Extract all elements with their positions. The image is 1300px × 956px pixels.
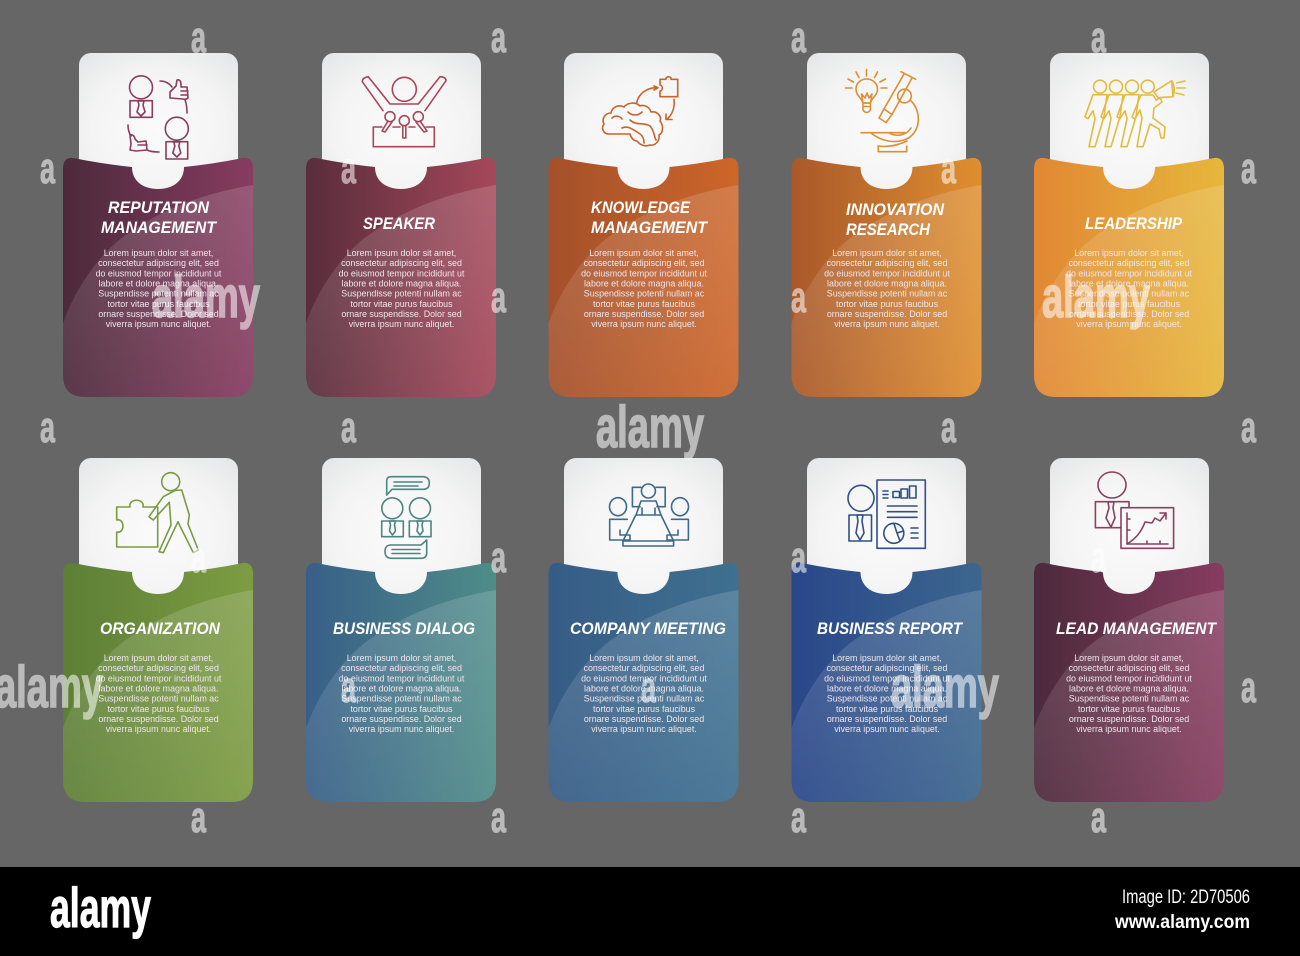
body text: do eiusmod tempor incididunt ut bbox=[96, 673, 222, 683]
watermarks: alamy bbox=[1042, 265, 1150, 330]
pocket bbox=[306, 563, 496, 802]
watermarks: a bbox=[1241, 144, 1256, 193]
watermarks: a bbox=[941, 144, 956, 193]
watermarks: a bbox=[791, 13, 806, 62]
heading: COMPANY MEETING bbox=[570, 619, 726, 638]
body text: ornare suspendisse. Dolor sed bbox=[1069, 714, 1189, 724]
white tab bbox=[79, 53, 238, 193]
body text: do eiusmod tempor incididunt ut bbox=[824, 268, 950, 278]
heading: RESEARCH bbox=[846, 220, 931, 239]
body text: ornare suspendisse. Dolor sed bbox=[341, 309, 462, 319]
pocket bbox=[63, 158, 253, 397]
body text: consectetur adipiscing elit, sed bbox=[1069, 258, 1189, 268]
card: company meeting bbox=[548, 458, 738, 802]
pocket bbox=[1034, 563, 1224, 802]
icon: light bulb and microscope bbox=[846, 70, 918, 152]
body text: ornare suspendisse. Dolor sed bbox=[584, 309, 704, 319]
card: business report bbox=[792, 458, 982, 802]
heading: KNOWLEDGE bbox=[591, 198, 691, 217]
heading bbox=[101, 198, 217, 237]
heading: BUSINESS REPORT bbox=[817, 619, 963, 638]
body text: Lorem ipsum dolor sit amet, bbox=[589, 653, 699, 663]
watermarks: a bbox=[341, 144, 356, 193]
body text: tortor vitae purus faucibus bbox=[836, 299, 939, 309]
heading: MANAGEMENT bbox=[101, 218, 217, 237]
white tab bbox=[807, 53, 966, 193]
body text: do eiusmod tempor incididunt ut bbox=[96, 268, 222, 278]
watermarks: a bbox=[791, 533, 806, 582]
body text: labore et dolore magna aliqua. bbox=[1069, 278, 1189, 288]
body text: tortor vitae purus faucibus bbox=[350, 704, 453, 714]
body text: do eiusmod tempor incididunt ut bbox=[339, 268, 465, 278]
watermarks: a bbox=[341, 663, 356, 712]
card: leadership bbox=[1034, 53, 1224, 397]
body text: do eiusmod tempor incididunt ut bbox=[339, 673, 465, 683]
body text: Suspendisse potenti nullam ac bbox=[584, 289, 705, 299]
body text: tortor vitae purus faucibus bbox=[107, 299, 210, 309]
body text: tortor vitae purus faucibus bbox=[1078, 299, 1181, 309]
watermarks: a bbox=[1241, 403, 1256, 452]
watermarks: a bbox=[1091, 793, 1106, 842]
watermarks: a bbox=[491, 273, 506, 322]
body text: do eiusmod tempor incididunt ut bbox=[1066, 268, 1192, 278]
body text: Lorem ipsum dolor sit amet, bbox=[104, 248, 213, 258]
body text: do eiusmod tempor incididunt ut bbox=[1066, 673, 1192, 683]
icon: person with report document bbox=[848, 480, 925, 548]
body text: viverra ipsum nunc aliquet. bbox=[834, 724, 940, 734]
body text: viverra ipsum nunc aliquet. bbox=[1076, 724, 1182, 734]
body text: tortor vitae purus faucibus bbox=[836, 704, 939, 714]
body text: viverra ipsum nunc aliquet. bbox=[349, 319, 454, 329]
card: business dialog bbox=[306, 458, 496, 802]
body text: Lorem ipsum dolor sit amet, bbox=[832, 653, 942, 663]
icon: people around meeting table bbox=[610, 484, 688, 546]
body text: do eiusmod tempor incididunt ut bbox=[824, 673, 950, 683]
watermarks: a bbox=[191, 793, 206, 842]
heading: ORGANIZATION bbox=[100, 619, 221, 638]
heading: LEAD MANAGEMENT bbox=[1056, 619, 1217, 638]
card: reputation management bbox=[63, 53, 253, 397]
pocket bbox=[548, 158, 738, 397]
heading: BUSINESS DIALOG bbox=[333, 619, 475, 638]
body text: viverra ipsum nunc aliquet. bbox=[834, 319, 940, 329]
footer bar bbox=[0, 867, 1300, 956]
watermarks: a bbox=[941, 403, 956, 452]
body text: ornare suspendisse. Dolor sed bbox=[98, 309, 219, 319]
image id: Image ID: 2D70506 bbox=[1122, 887, 1250, 908]
watermarks: a bbox=[1091, 13, 1106, 62]
pocket bbox=[548, 563, 738, 802]
body text: tortor vitae purus faucibus bbox=[1078, 704, 1181, 714]
white tab bbox=[807, 458, 966, 598]
body text: Lorem ipsum dolor sit amet, bbox=[104, 653, 213, 663]
card: knowledge management bbox=[548, 53, 738, 397]
icon: people exchanging thumbs up bbox=[128, 76, 188, 159]
body text: labore et dolore magna aliqua. bbox=[584, 684, 704, 694]
body text: ornare suspendisse. Dolor sed bbox=[341, 714, 462, 724]
body text: consectetur adipiscing elit, sed bbox=[584, 258, 704, 268]
heading: SPEAKER bbox=[363, 214, 436, 233]
white tab bbox=[1050, 458, 1209, 598]
body text: ornare suspendisse. Dolor sed bbox=[98, 714, 219, 724]
pocket bbox=[63, 563, 253, 802]
watermarks: a bbox=[491, 13, 506, 62]
body text: tortor vitae purus faucibus bbox=[107, 704, 210, 714]
icon: brain and puzzle piece bbox=[603, 77, 678, 146]
icon: speaker with microphones bbox=[362, 77, 446, 147]
body text: labore et dolore magna aliqua. bbox=[99, 684, 218, 694]
icon: leader with megaphone and followers bbox=[1085, 80, 1185, 147]
icon: two people in dialog bbox=[382, 477, 431, 558]
card: speaker bbox=[306, 53, 496, 397]
watermarks: alamy bbox=[152, 265, 260, 330]
body text: Suspendisse potenti nullam ac bbox=[98, 694, 219, 704]
card: lead management bbox=[1034, 458, 1224, 802]
watermarks: a bbox=[791, 273, 806, 322]
heading: INNOVATION bbox=[846, 200, 945, 219]
body text: Suspendisse potenti nullam ac bbox=[341, 289, 462, 299]
heading bbox=[846, 200, 945, 239]
heading: MANAGEMENT bbox=[591, 218, 709, 237]
footer logo: alamy bbox=[50, 876, 151, 939]
body text: labore et dolore magna aliqua. bbox=[342, 684, 461, 694]
body text: viverra ipsum nunc aliquet. bbox=[106, 319, 211, 329]
body text: viverra ipsum nunc aliquet. bbox=[106, 724, 211, 734]
body text: Suspendisse potenti nullam ac bbox=[827, 289, 948, 299]
body text: viverra ipsum nunc aliquet. bbox=[591, 319, 697, 329]
body text: consectetur adipiscing elit, sed bbox=[98, 258, 219, 268]
pocket bbox=[792, 563, 982, 802]
card: organization bbox=[63, 458, 253, 802]
website: www.alamy.com bbox=[1114, 912, 1250, 933]
body text: Suspendisse potenti nullam ac bbox=[827, 694, 948, 704]
card: innovation research bbox=[792, 53, 982, 397]
body text: viverra ipsum nunc aliquet. bbox=[591, 724, 697, 734]
body text: Lorem ipsum dolor sit amet, bbox=[347, 653, 456, 663]
body text: ornare suspendisse. Dolor sed bbox=[827, 714, 947, 724]
heading: REPUTATION bbox=[108, 198, 210, 217]
body text: Lorem ipsum dolor sit amet, bbox=[589, 248, 699, 258]
body text: labore et dolore magna aliqua. bbox=[1069, 684, 1189, 694]
body text: labore et dolore magna aliqua. bbox=[827, 684, 947, 694]
body text: ornare suspendisse. Dolor sed bbox=[827, 309, 947, 319]
watermarks: a bbox=[341, 403, 356, 452]
white tab bbox=[322, 458, 481, 598]
body text: labore et dolore magna aliqua. bbox=[99, 278, 218, 288]
body text: ornare suspendisse. Dolor sed bbox=[1069, 309, 1189, 319]
watermarks: a bbox=[191, 13, 206, 62]
watermarks: a bbox=[1091, 533, 1106, 582]
white tab bbox=[1050, 53, 1209, 193]
body text: Suspendisse potenti nullam ac bbox=[1069, 289, 1190, 299]
body text: labore et dolore magna aliqua. bbox=[584, 278, 704, 288]
watermarks: a bbox=[791, 793, 806, 842]
body text: consectetur adipiscing elit, sed bbox=[827, 663, 947, 673]
body text: consectetur adipiscing elit, sed bbox=[341, 258, 462, 268]
body text: labore et dolore magna aliqua. bbox=[827, 278, 947, 288]
icon: person pushing puzzle piece bbox=[117, 473, 198, 553]
white tab bbox=[564, 458, 723, 598]
body text: consectetur adipiscing elit, sed bbox=[341, 663, 462, 673]
body text: tortor vitae purus faucibus bbox=[350, 299, 453, 309]
watermarks: alamy bbox=[891, 655, 999, 720]
watermarks: a bbox=[191, 533, 206, 582]
body text: Lorem ipsum dolor sit amet, bbox=[1074, 248, 1184, 258]
watermarks: a bbox=[491, 793, 506, 842]
body text: Lorem ipsum dolor sit amet, bbox=[347, 248, 456, 258]
watermarks: a bbox=[1241, 663, 1256, 712]
heading: LEADERSHIP bbox=[1085, 214, 1183, 233]
white tab bbox=[79, 458, 238, 598]
watermarks: a bbox=[40, 144, 55, 193]
body text: Suspendisse potenti nullam ac bbox=[1069, 694, 1190, 704]
body text: labore et dolore magna aliqua. bbox=[342, 278, 461, 288]
white tab bbox=[322, 53, 481, 193]
body text: do eiusmod tempor incididunt ut bbox=[581, 673, 707, 683]
body text: consectetur adipiscing elit, sed bbox=[584, 663, 704, 673]
white tab bbox=[564, 53, 723, 193]
body text: tortor vitae purus faucibus bbox=[593, 704, 696, 714]
body text: Lorem ipsum dolor sit amet, bbox=[832, 248, 942, 258]
watermarks: a bbox=[40, 403, 55, 452]
body text: consectetur adipiscing elit, sed bbox=[98, 663, 219, 673]
body text: viverra ipsum nunc aliquet. bbox=[1076, 319, 1182, 329]
pocket bbox=[1034, 158, 1224, 397]
icon: person with growth chart bbox=[1095, 472, 1174, 548]
body text: tortor vitae purus faucibus bbox=[593, 299, 696, 309]
body text: ornare suspendisse. Dolor sed bbox=[584, 714, 704, 724]
pocket bbox=[306, 158, 496, 397]
body text: viverra ipsum nunc aliquet. bbox=[349, 724, 454, 734]
body text: consectetur adipiscing elit, sed bbox=[1069, 663, 1189, 673]
watermarks: a bbox=[491, 533, 506, 582]
body text: consectetur adipiscing elit, sed bbox=[827, 258, 947, 268]
pocket bbox=[792, 158, 982, 397]
body text: Suspendisse potenti nullam ac bbox=[341, 694, 462, 704]
heading bbox=[591, 198, 709, 237]
body text: Suspendisse potenti nullam ac bbox=[584, 694, 705, 704]
watermarks: alamy bbox=[596, 395, 704, 460]
body text: Suspendisse potenti nullam ac bbox=[98, 289, 219, 299]
body text: Lorem ipsum dolor sit amet, bbox=[1074, 653, 1184, 663]
body text: do eiusmod tempor incididunt ut bbox=[581, 268, 707, 278]
watermarks: a bbox=[641, 663, 656, 712]
